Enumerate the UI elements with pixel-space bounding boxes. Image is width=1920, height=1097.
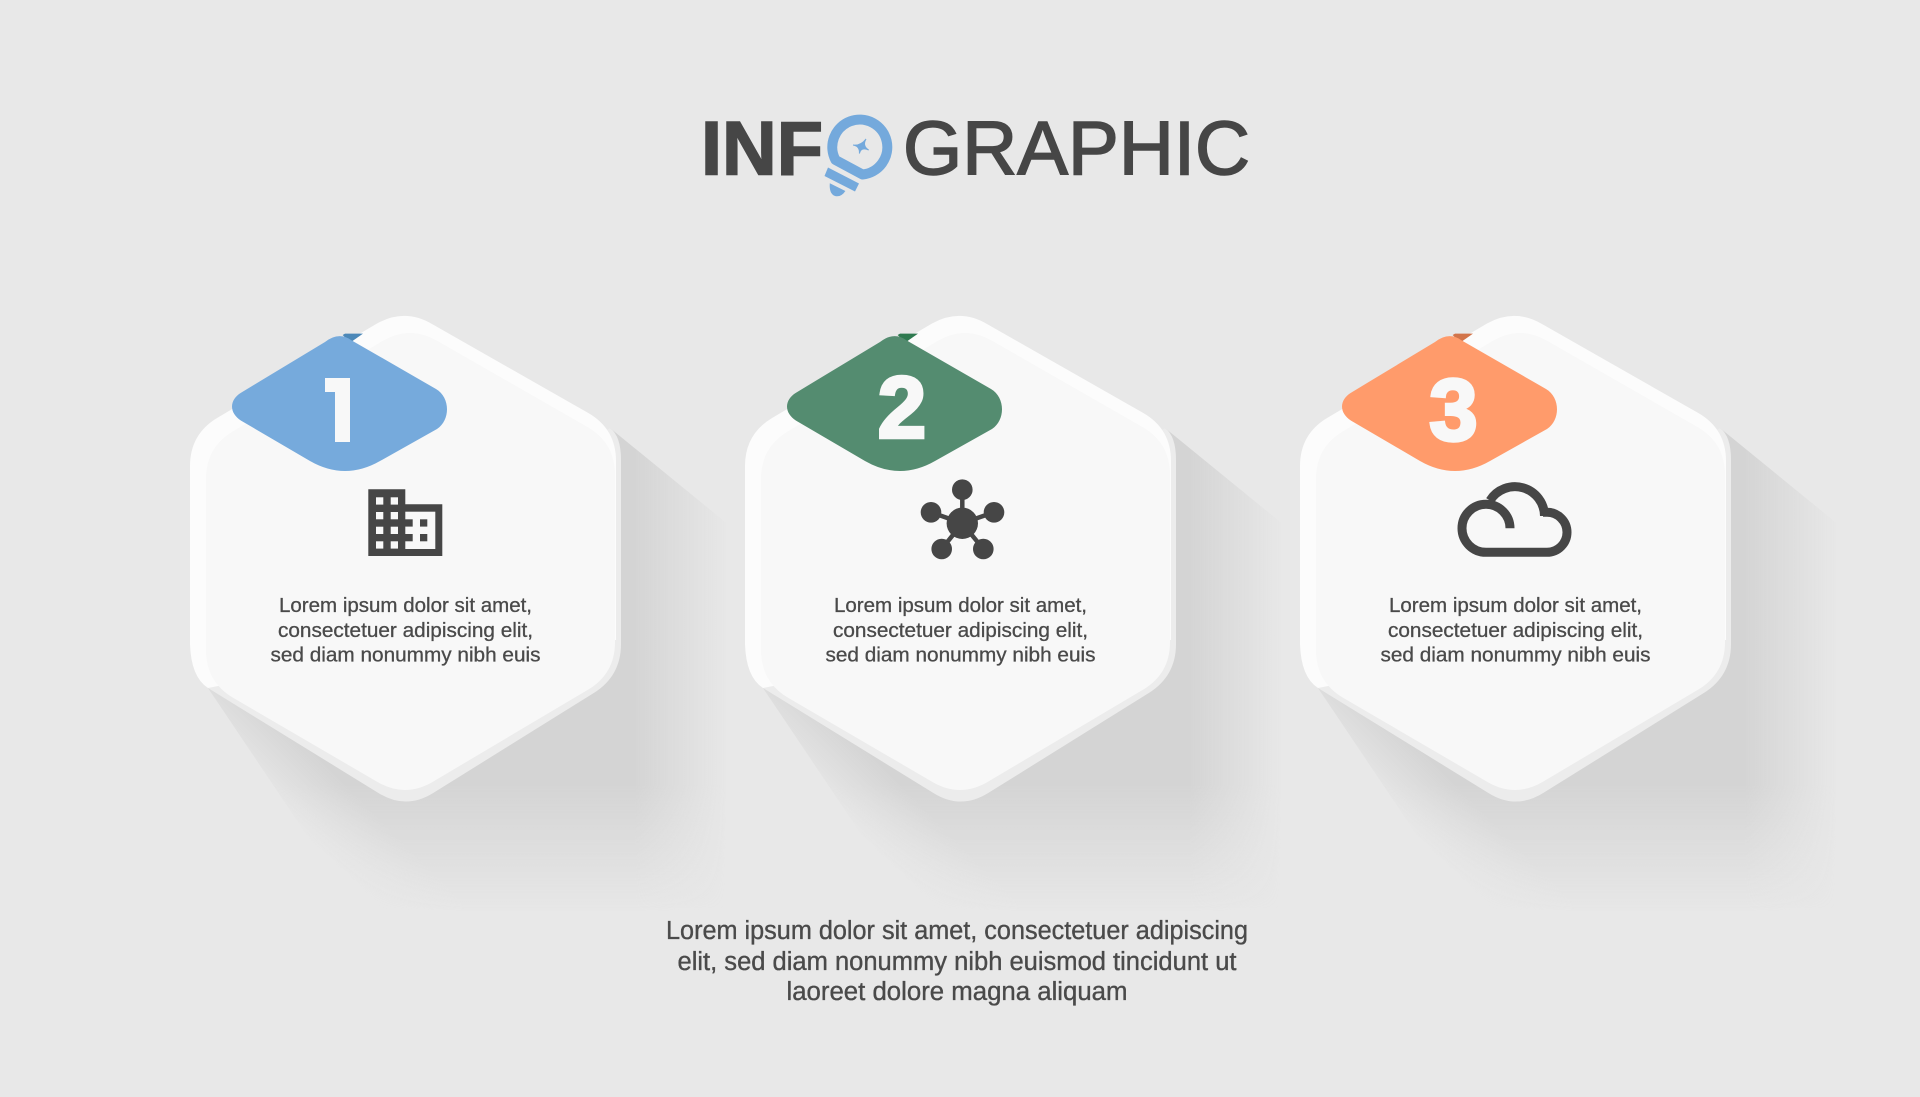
- bottom text block: [666, 917, 1248, 1006]
- number badge: [787, 336, 1002, 471]
- bottom text block: elit, sed diam nonummy nibh euismod tincidunt ut: [678, 948, 1236, 976]
- number 1: 1: [315, 362, 363, 459]
- panel: step 3: [1300, 316, 1801, 863]
- description: consectetuer adipiscing elit,: [1388, 619, 1643, 642]
- panel: step 1: [190, 316, 691, 864]
- description: sed diam nonummy nibh euis: [826, 644, 1096, 666]
- description: Lorem ipsum dolor sit amet,: [279, 594, 532, 617]
- hexagon lower edge: [763, 428, 1176, 802]
- title word: GRAPHIC: GRAPHIC: [903, 106, 1250, 192]
- hexagon upper edge: [745, 316, 1171, 688]
- panel: step 2: [745, 316, 1246, 864]
- description: sed diam nonummy nibh euis: [1380, 644, 1650, 666]
- number badge: [232, 336, 447, 471]
- long shadow: [764, 430, 1246, 864]
- number 2: 2: [878, 360, 926, 456]
- description: [826, 594, 1096, 666]
- hexagon upper edge: [190, 316, 616, 688]
- bottom text block: laoreet dolore magna aliquam: [786, 978, 1128, 1006]
- description: [1380, 594, 1650, 666]
- description: consectetuer adipiscing elit,: [833, 619, 1088, 642]
- bottom text block: Lorem ipsum dolor sit amet, consectetuer adipiscing: [666, 917, 1248, 945]
- hexagon lower edge: [1318, 428, 1731, 802]
- title word: INF: INF: [701, 106, 823, 192]
- icon: office buildings: [368, 489, 442, 556]
- long shadow: [1318, 430, 1801, 863]
- hexagon upper edge: [1300, 316, 1726, 688]
- title: [701, 106, 1250, 196]
- hexagon face: [1316, 333, 1725, 790]
- icon: cloud: [1462, 487, 1567, 552]
- icon: network hub: [921, 479, 1004, 559]
- description: Lorem ipsum dolor sit amet,: [1389, 594, 1642, 617]
- number 3: 3: [1429, 362, 1478, 459]
- ribbon fold: [898, 334, 918, 343]
- hexagon lower edge: [208, 428, 621, 802]
- number badge: [1342, 336, 1557, 471]
- ribbon fold: [1453, 334, 1473, 343]
- hexagon face: [206, 333, 615, 790]
- description: sed diam nonummy nibh euis: [270, 644, 540, 666]
- description: consectetuer adipiscing elit,: [278, 619, 533, 642]
- long shadow: [208, 430, 691, 864]
- description: Lorem ipsum dolor sit amet,: [834, 594, 1087, 617]
- description: [270, 594, 540, 666]
- number 1: [325, 378, 350, 442]
- ribbon fold: [343, 334, 363, 343]
- hexagon face: [761, 333, 1170, 790]
- icon: light bulb: [824, 120, 887, 196]
